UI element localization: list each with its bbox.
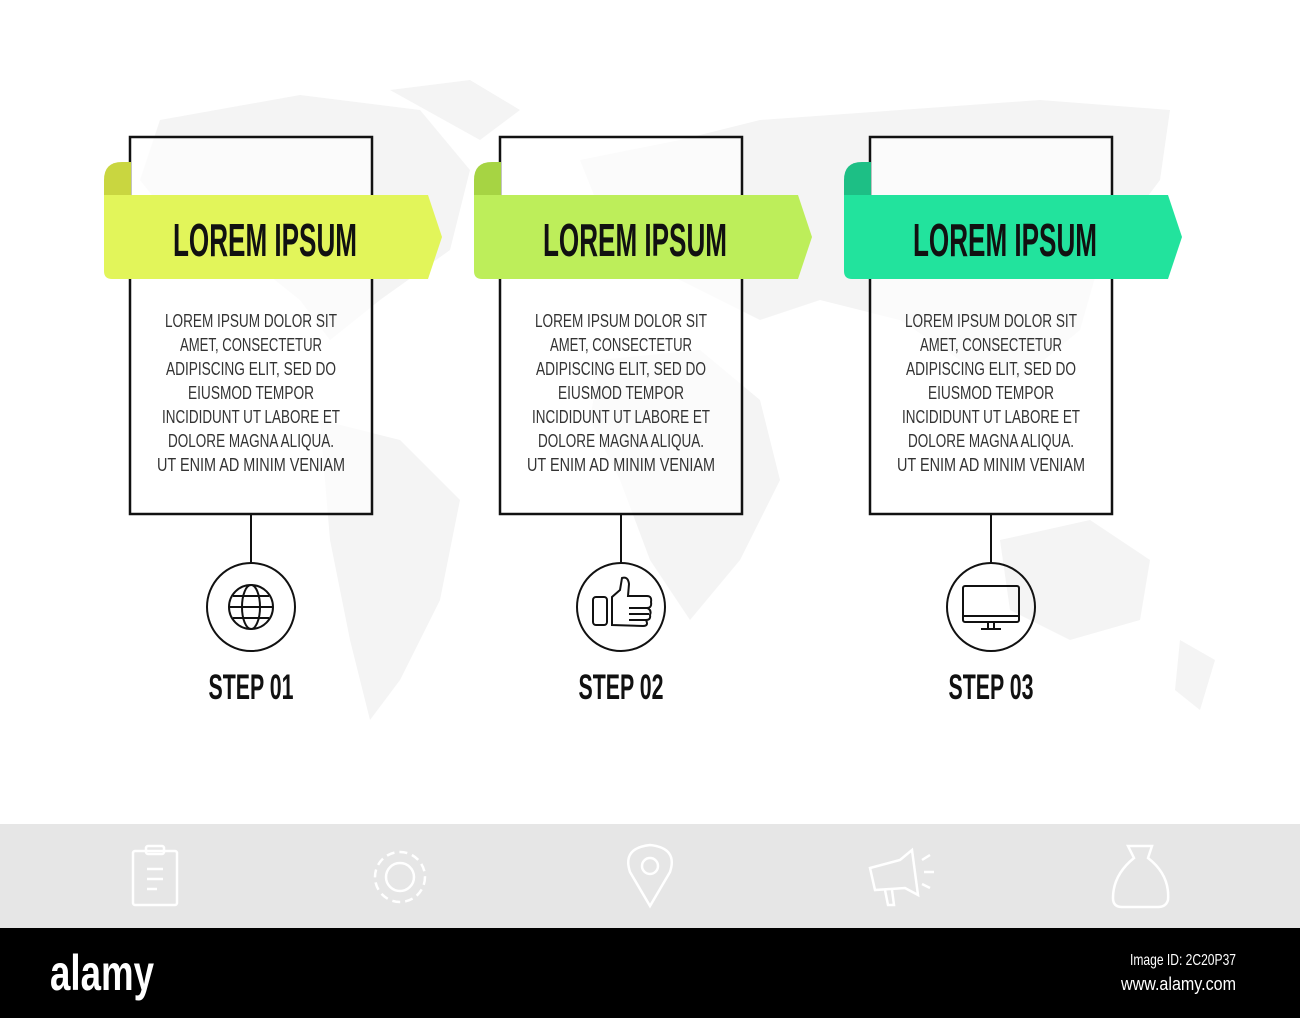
icon: sack — [1113, 846, 1168, 907]
text block: step 3: INCIDIDUNT UT LABORE ET — [902, 407, 1080, 427]
step 2 — [474, 137, 812, 707]
icon: thumbs up — [577, 563, 665, 651]
text block: step 1: ADIPISCING ELIT, SED DO — [166, 359, 336, 379]
icon: map pin — [628, 845, 672, 906]
step 3 — [844, 137, 1182, 707]
text block: step 3: AMET, CONSECTETUR — [920, 335, 1062, 355]
text block: step 1: INCIDIDUNT UT LABORE ET — [162, 407, 340, 427]
banner: step 1 — [104, 162, 442, 279]
banner: step 3: LOREM IPSUM — [913, 214, 1097, 266]
text block: step 1: UT ENIM AD MINIM VENIAM — [157, 455, 345, 475]
text block: step 3: ADIPISCING ELIT, SED DO — [906, 359, 1076, 379]
text block: step 1 — [157, 311, 345, 475]
text block: step 2: INCIDIDUNT UT LABORE ET — [532, 407, 710, 427]
label: step 02: STEP 02 — [578, 668, 664, 707]
text block: step 2 — [527, 311, 715, 475]
text block: step 2: AMET, CONSECTETUR — [550, 335, 692, 355]
text block: step 1: AMET, CONSECTETUR — [180, 335, 322, 355]
text block: step 3: EIUSMOD TEMPOR — [928, 383, 1054, 403]
text block: step 3: LOREM IPSUM DOLOR SIT — [905, 311, 1077, 331]
panel: step 1 card — [130, 137, 372, 514]
text block: step 2: UT ENIM AD MINIM VENIAM — [527, 455, 715, 475]
icon: globe — [207, 563, 295, 651]
text block: step 1: EIUSMOD TEMPOR — [188, 383, 314, 403]
icon: clipboard — [133, 846, 177, 905]
footer: Image ID: 2C20P37 — [1130, 952, 1236, 969]
text block: step 3 — [897, 311, 1085, 475]
text block: step 2: EIUSMOD TEMPOR — [558, 383, 684, 403]
text block: step 2: DOLORE MAGNA ALIQUA. — [538, 431, 704, 451]
background world map — [140, 80, 1215, 720]
banner: step 2 — [474, 162, 812, 279]
panel: step 2 card — [500, 137, 742, 514]
text block: step 1: DOLORE MAGNA ALIQUA. — [168, 431, 334, 451]
icon: gear — [375, 852, 425, 902]
panel: step 3 card — [870, 137, 1112, 514]
footer — [0, 928, 1300, 1018]
text block: step 2: LOREM IPSUM DOLOR SIT — [535, 311, 707, 331]
icon: monitor — [947, 563, 1035, 651]
bottom icon bar — [0, 824, 1300, 928]
icon: megaphone — [870, 850, 934, 905]
label: step 03: STEP 03 — [948, 668, 1034, 707]
label: step 01: STEP 01 — [208, 668, 294, 707]
footer: alamy — [50, 945, 154, 1001]
banner: step 2: LOREM IPSUM — [543, 214, 727, 266]
step 1 — [104, 137, 442, 707]
footer: www.alamy.com — [1120, 974, 1236, 994]
text block: step 3: UT ENIM AD MINIM VENIAM — [897, 455, 1085, 475]
text block: step 1: LOREM IPSUM DOLOR SIT — [165, 311, 337, 331]
banner: step 1: LOREM IPSUM — [173, 214, 357, 266]
banner: step 3 — [844, 162, 1182, 279]
text block: step 3: DOLORE MAGNA ALIQUA. — [908, 431, 1074, 451]
text block: step 2: ADIPISCING ELIT, SED DO — [536, 359, 706, 379]
